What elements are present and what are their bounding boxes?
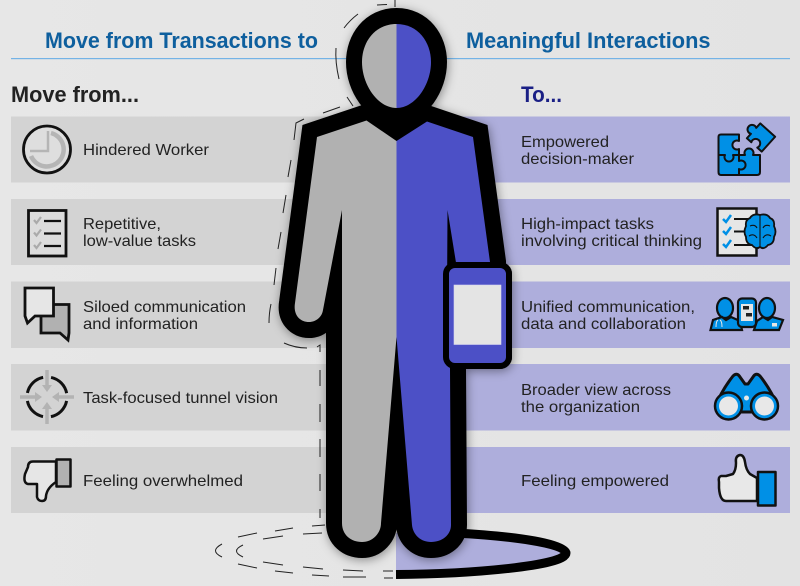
- right row labels: Feeling empowered: [521, 473, 669, 490]
- icon: chat bubbles: [25, 288, 69, 340]
- icon: clock: [24, 126, 70, 173]
- right row labels: Empowered: [521, 134, 609, 151]
- right row labels: involving critical thinking: [521, 233, 702, 250]
- icon: thumbs up: [719, 455, 776, 506]
- icon: checklist and brain: [718, 208, 776, 256]
- left row labels: low-value tasks: [83, 233, 196, 250]
- icon: puzzle: [718, 119, 775, 175]
- tablet: [446, 265, 509, 366]
- left row labels: Repetitive,: [83, 216, 161, 233]
- right row labels: data and collaboration: [521, 316, 686, 333]
- icon: team with tablet: [710, 298, 783, 330]
- right row labels: Broader view across: [521, 382, 671, 399]
- right row labels: Unified communication,: [521, 299, 695, 316]
- right half: blue: [396, 24, 490, 542]
- icon: binoculars: [715, 374, 778, 420]
- left row labels: and information: [83, 316, 198, 333]
- title: Move from Transactions to: [45, 28, 318, 53]
- tablet face: [446, 265, 509, 366]
- title: [45, 28, 710, 53]
- heading: to: To...: [521, 82, 562, 107]
- heading: move from: Move from...: [11, 82, 139, 107]
- icon: checklist: [28, 210, 66, 256]
- right row panels: [396, 116, 790, 513]
- left row labels: Hindered Worker: [83, 142, 210, 159]
- dashed outline of former self: [216, 0, 395, 578]
- left half: grey: [295, 24, 396, 542]
- right row labels: [521, 134, 702, 490]
- right row labels: High-impact tasks: [521, 216, 654, 233]
- left row labels: Siloed communication: [83, 299, 246, 316]
- title: Meaningful Interactions: [466, 28, 710, 53]
- right row labels: the organization: [521, 399, 640, 416]
- ground shadow ellipse: [396, 533, 566, 574]
- left row labels: [83, 142, 278, 490]
- icon: thumbs down: [24, 460, 70, 501]
- left row labels: Task-focused tunnel vision: [83, 390, 278, 407]
- left row panels: [11, 116, 397, 513]
- central figure: [295, 24, 509, 542]
- left row labels: Feeling overwhelmed: [83, 473, 243, 490]
- right row labels: decision-maker: [521, 151, 635, 168]
- icon: target with arrows: [20, 370, 74, 424]
